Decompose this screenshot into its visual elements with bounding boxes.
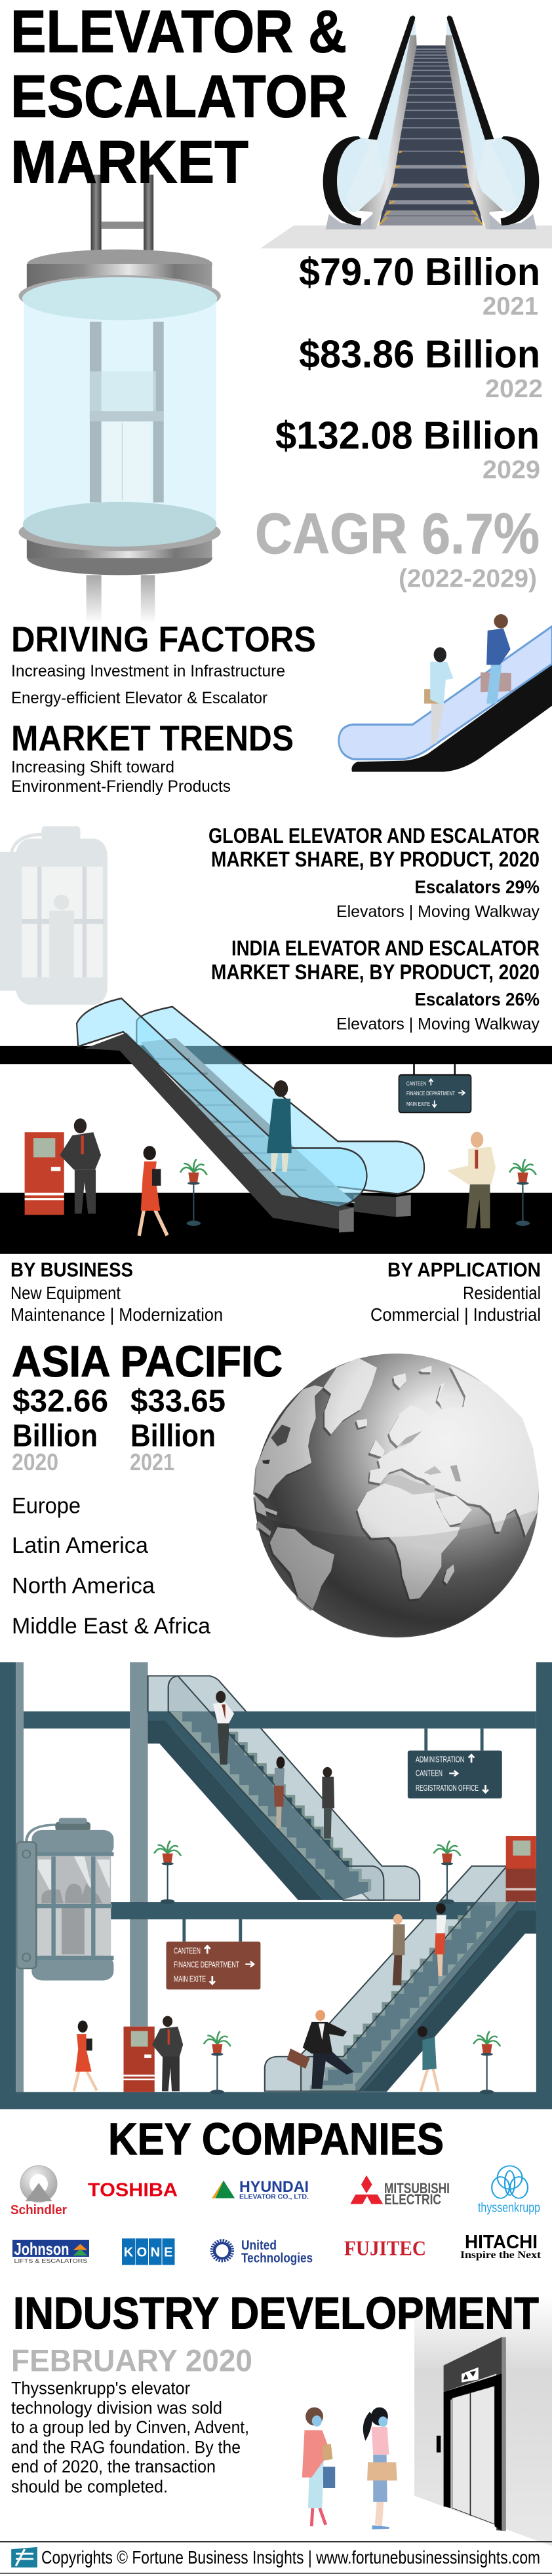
global share [208, 824, 540, 921]
company logos [10, 2166, 542, 2265]
paragraph: to a group led by Cinven, Advent, [11, 2417, 249, 2437]
by business: Maintenance | Modernization [10, 1304, 223, 1325]
illustration: black floor escalator scene [0, 998, 552, 1254]
illustration: faded elevator [0, 826, 108, 1005]
front escalator [77, 998, 367, 1232]
illustration: two women waiting [302, 2408, 397, 2528]
logo: KONE: O [137, 2246, 147, 2260]
person with phone [424, 647, 454, 743]
logo: Hitachi: HITACHI [465, 2232, 538, 2253]
man at ATM [60, 1118, 101, 1214]
middle floor beam [109, 1902, 536, 1934]
paragraph: and the RAG foundation. By the [11, 2437, 241, 2457]
illustration: silver escalator on floor [260, 15, 552, 248]
india share [211, 936, 540, 1033]
driving factor two: Energy-efficient Elevator & Escalator [11, 689, 267, 707]
market size 2021: 2021 [483, 292, 538, 321]
ATM right [506, 1836, 536, 1902]
lower escalator [301, 1866, 536, 2092]
asia pacific 2020: Billion [12, 1419, 98, 1454]
illustration: elevator doors and wall [414, 2296, 552, 2546]
woman with ponytail [363, 2408, 397, 2528]
driving factor one: Increasing Investment in Infrastructure [11, 662, 285, 680]
sign text: CANTEEN [406, 1080, 426, 1087]
panel: driving factors [11, 619, 316, 707]
logo: Fujitec: FUJITEC [344, 2236, 426, 2260]
trend text: Environment-Friendly Products [11, 777, 231, 796]
trend text [11, 758, 231, 796]
plant [154, 1841, 181, 1904]
illustration: teal building scene [0, 1662, 552, 2109]
building sign text: CANTEEN [174, 1947, 201, 1956]
logo: Hyundai [212, 2178, 309, 2201]
building sign text: CANTEEN [416, 1769, 443, 1778]
title: MARKET [10, 129, 248, 196]
share headings [208, 824, 540, 1033]
ATM ground [123, 2027, 155, 2092]
woman in red [139, 1146, 167, 1236]
woman on upper escalator [274, 1757, 285, 1828]
other regions: Europe [12, 1493, 81, 1518]
logo: thyssenkrupp [478, 2166, 540, 2215]
logo: KONE: E [164, 2246, 172, 2260]
logo: Schindler [10, 2166, 67, 2217]
date: FEBRUARY 2020 [11, 2343, 252, 2378]
logo: KONE: K [124, 2246, 134, 2260]
by business: New Equipment [10, 1283, 121, 1303]
market size 2022 [299, 333, 543, 403]
global share: Escalators 29% [414, 876, 540, 897]
woman on escalator [267, 1080, 292, 1172]
plant [473, 2031, 500, 2094]
other regions: Middle East & Africa [12, 1614, 210, 1639]
sign: administration [408, 1728, 502, 1799]
asia pacific 2021: $33.65 [130, 1384, 226, 1419]
plant [509, 1159, 536, 1226]
global share: Elevators | Moving Walkway [336, 903, 540, 921]
upper escalator [148, 1676, 384, 1900]
sign [399, 1064, 471, 1112]
logo: Mitsubishi Electric: MITSUBISHI [384, 2180, 450, 2196]
paragraph: technology division was sold [11, 2398, 222, 2417]
asia pacific 2020 [12, 1384, 108, 1475]
market size 2022: 2022 [485, 375, 543, 403]
heading: asia pacific: ASIA PACIFIC [12, 1337, 283, 1386]
logo: Mitsubishi Electric: ELECTRIC [384, 2191, 441, 2208]
logo: United Technologies [213, 2238, 313, 2265]
market size 2029: 2029 [483, 456, 540, 484]
building sign text: ADMINISTRATION [416, 1755, 464, 1765]
other regions: North America [12, 1574, 155, 1599]
footer [0, 2541, 552, 2573]
man in brown jacket [393, 1914, 405, 1985]
panel: industry development text [11, 2343, 252, 2496]
by application: BY APPLICATION [387, 1259, 541, 1281]
asia pacific 2020: $32.66 [12, 1384, 108, 1419]
upper floor beam [24, 1711, 536, 1728]
illustration: people on blue escalator [339, 614, 552, 771]
logo: United Technologies: United [241, 2238, 277, 2253]
heading: market trends: MARKET TRENDS [11, 718, 294, 758]
asia pacific 2021 [130, 1384, 226, 1475]
logo: Johnson: LIFTS & ESCALATORS [14, 2258, 88, 2264]
market size 2029: $132.08 Billion [275, 414, 540, 458]
building sign text [174, 1755, 479, 1984]
person with mask [481, 614, 511, 704]
man at ATM ground [152, 2016, 183, 2091]
other regions [12, 1493, 210, 1639]
logo: Hitachi: Inspire the Next [460, 2250, 542, 2261]
plant [204, 2031, 231, 2094]
india share: Escalators 26% [414, 989, 540, 1009]
heading: key companies: KEY COMPANIES [108, 2114, 444, 2164]
sign text: MAIN EXITE [406, 1101, 430, 1107]
building sign text: FINANCE DEPARTMENT [174, 1961, 239, 1970]
asia pacific 2021: 2021 [130, 1449, 174, 1475]
paragraph: Thyssenkrupp's elevator [11, 2379, 190, 2398]
paragraph: should be completed. [11, 2476, 168, 2496]
market size 2022: $83.86 Billion [299, 333, 540, 376]
running man with briefcase [287, 2010, 354, 2089]
by application: Residential [463, 1283, 541, 1303]
CAGR [255, 502, 540, 593]
logo: Hyundai: HYUNDAI [239, 2178, 309, 2196]
logo: United Technologies: Technologies [241, 2251, 313, 2265]
CAGR: (2022-2029) [399, 565, 537, 593]
logo: Hyundai: ELEVATOR CO., LTD. [239, 2194, 309, 2201]
logo: Hitachi [460, 2232, 542, 2261]
india share: Elevators | Moving Walkway [336, 1015, 540, 1033]
elevator [16, 1818, 113, 1980]
paragraph [11, 2379, 249, 2496]
woman with red skirt [435, 1903, 446, 1976]
trend text: Increasing Shift toward [11, 758, 174, 777]
logo: Toshiba: TOSHIBA [88, 2179, 178, 2200]
man in beige jacket [447, 1132, 496, 1228]
by business: BY BUSINESS [10, 1259, 133, 1281]
woman in pink coat [302, 2408, 335, 2526]
woman in red at ground [74, 2021, 97, 2091]
logo: Mitsubishi Electric [350, 2176, 450, 2208]
logo: KONE: N [151, 2246, 160, 2260]
logo: Fortune Business Insights [11, 2547, 37, 2567]
logo: Johnson: Johnson [14, 2239, 69, 2259]
building sign text: MAIN EXITE [174, 1975, 206, 1984]
by application [370, 1259, 541, 1325]
sign text: FINANCE DEPARTMENT [406, 1090, 455, 1097]
title: ESCALATOR [10, 64, 347, 130]
rear escalator [136, 1007, 424, 1217]
panel: market trends [11, 718, 294, 796]
asia pacific 2021: Billion [130, 1419, 216, 1454]
title [10, 0, 347, 196]
title: ELEVATOR & [10, 0, 347, 66]
market size 2021 [299, 250, 540, 321]
by business [10, 1259, 223, 1325]
ATM [25, 1132, 64, 1215]
man in dark suit [322, 1767, 334, 1839]
regional panel: asia pacific [12, 1337, 283, 1639]
building sign text: REGISTRATION OFFICE [416, 1784, 479, 1793]
lower escalator rear balustrade [265, 1866, 517, 2091]
logo: Schindler: Schindler [10, 2203, 67, 2217]
asia pacific 2020: 2020 [12, 1449, 58, 1475]
illustration: globe [253, 1354, 539, 1637]
paragraph: end of 2020, the transaction [11, 2457, 216, 2476]
market size figures [255, 250, 543, 593]
sign: canteen [166, 1919, 260, 1989]
woman with phone [418, 2026, 439, 2091]
plant [180, 1159, 207, 1226]
sign text [406, 1080, 455, 1107]
upper escalator rear balustrade [148, 1676, 420, 1900]
market size 2029 [275, 414, 540, 484]
heading: driving factors: DRIVING FACTORS [11, 619, 316, 659]
man with folded arms [213, 1691, 234, 1765]
logo: KONE [122, 2238, 174, 2265]
plant [434, 1841, 460, 1904]
illustration: glass elevator [18, 175, 221, 623]
other regions: Latin America [12, 1533, 148, 1558]
market size 2021: $79.70 Billion [299, 250, 540, 294]
